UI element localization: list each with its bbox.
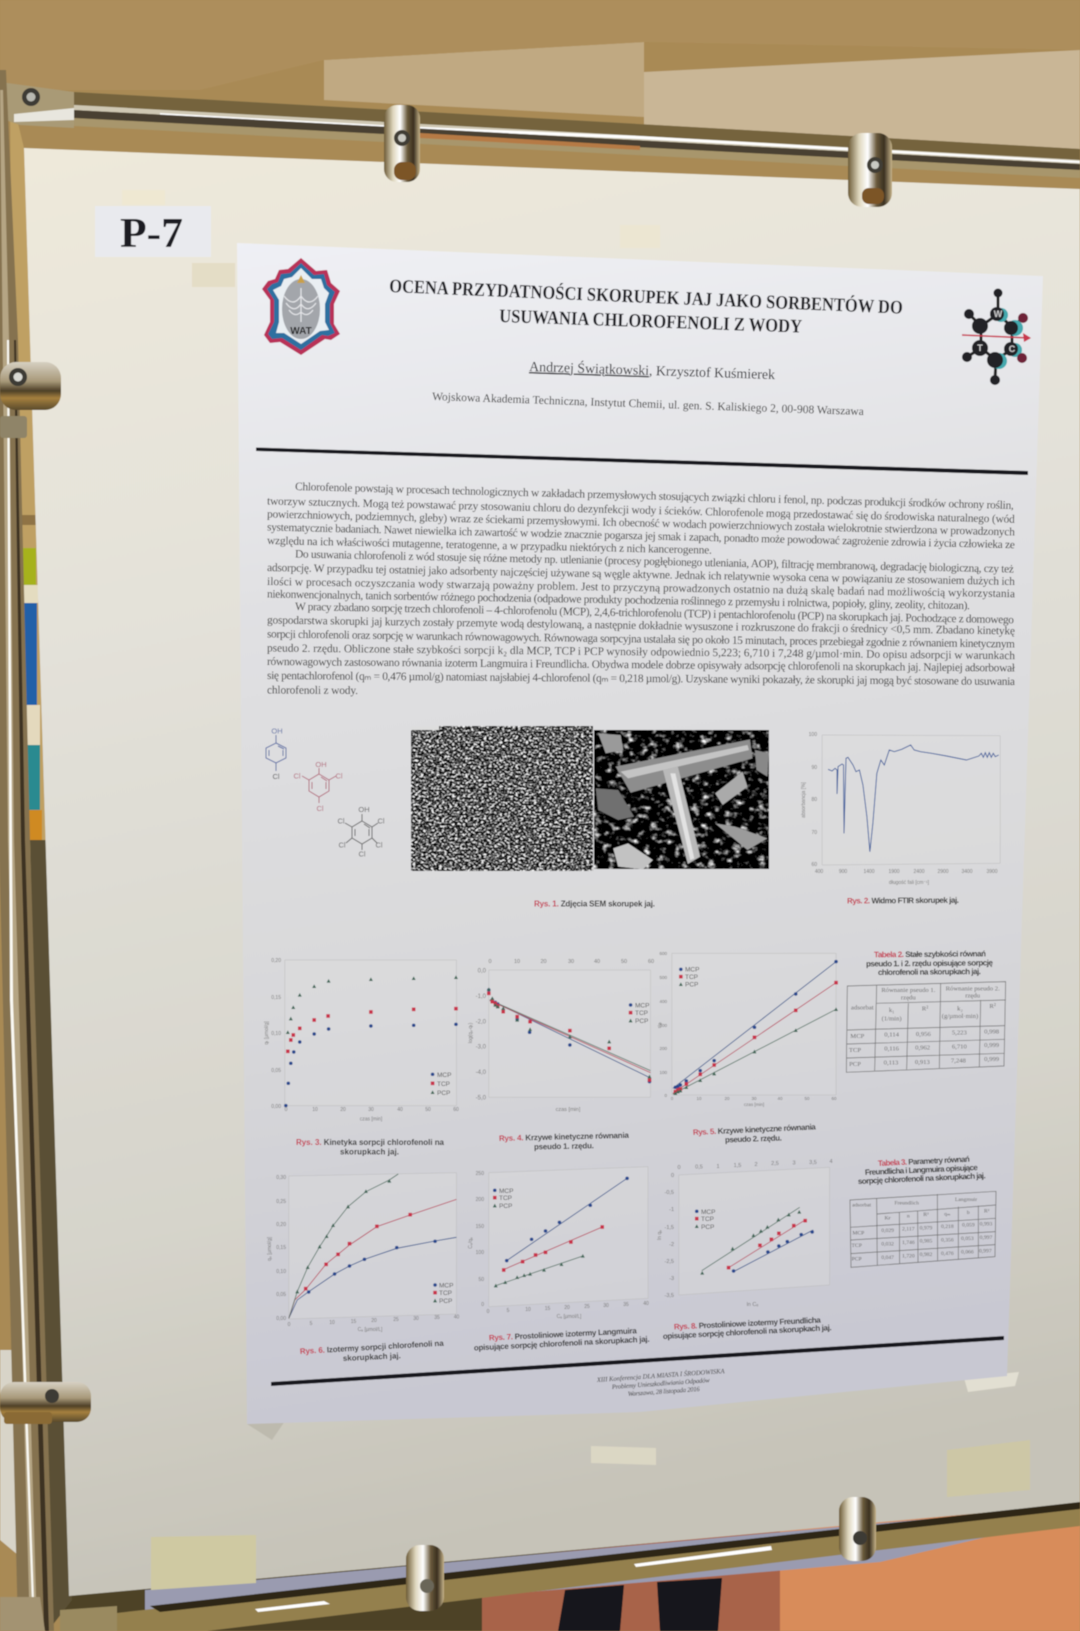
chart: Rys. 7 Langmuir: 30 bbox=[603, 1303, 609, 1309]
chart: Rys. 4 pseudo first order: 40 bbox=[594, 959, 600, 965]
chart: Rys. 6 sorption isotherms: 5 bbox=[310, 1321, 313, 1327]
table 3 grid and values: 0,985 bbox=[920, 1238, 933, 1244]
chart: Rys. 3 kinetics: MCP bbox=[437, 1072, 451, 1079]
table 2 grid and values: 0,998 bbox=[984, 1028, 1000, 1035]
table 2 grid and values: Równanie pseudo 2. bbox=[946, 985, 1000, 992]
chart: Rys. 7 Langmuir: 5 bbox=[507, 1308, 510, 1314]
table 2 grid and values: MCP bbox=[850, 1033, 865, 1040]
caption: Rys. 3 bbox=[296, 1138, 445, 1156]
table 2 grid and values: 0,956 bbox=[916, 1031, 931, 1038]
clamp: left 2 bbox=[0, 1382, 91, 1424]
chart: Rys. 6 sorption isotherms: MCP bbox=[439, 1282, 453, 1290]
chemical structures bbox=[266, 726, 385, 858]
chart: Rys. 7 Langmuir: 50 bbox=[478, 1277, 484, 1283]
chart: Rys. 6 sorption isotherms: 20 bbox=[371, 1318, 377, 1324]
chart: Rys. 4 pseudo first order: MCP bbox=[635, 1002, 649, 1010]
background: tape patches bbox=[122, 190, 1030, 1590]
structure: MCP: OH bbox=[271, 726, 283, 736]
chart: Rys. 3 kinetics: 40 bbox=[397, 1107, 403, 1113]
bottom rail bbox=[0, 1502, 1080, 1631]
chart: Rys. 8 Freundlich: 1,5 bbox=[734, 1163, 741, 1169]
chart: FTIR spectrum: 3400 bbox=[961, 869, 973, 875]
chart: Rys. 4 pseudo first order: 20 bbox=[540, 959, 547, 965]
chart: Rys. 7 Langmuir: 20 bbox=[564, 1305, 570, 1311]
table 3: Freundlich and Langmuir parameters bbox=[850, 1155, 996, 1267]
chart: Rys. 8 Freundlich: 3,5 bbox=[809, 1160, 817, 1166]
text block: introduction: chlorofenoli z wody. bbox=[267, 685, 358, 697]
table 3 grid and values: TCP bbox=[851, 1243, 862, 1249]
chart: Rys. 8 Freundlich: 0 bbox=[677, 1165, 681, 1171]
caption: Rys. 7 bbox=[474, 1326, 650, 1352]
chart: Rys. 8 Freundlich: 2,5 bbox=[771, 1161, 779, 1167]
background: colourful strip behind the board bbox=[0, 90, 72, 1631]
chart: Rys. 6 sorption isotherms: qₑ [µmol/g] bbox=[267, 1236, 273, 1261]
chart: Rys. 5 pseudo second order: 20 bbox=[724, 1096, 730, 1101]
table 2 heading: chlorofenoli na skorupkach jaj. bbox=[878, 967, 981, 977]
chart: Rys. 8 Freundlich: MCP bbox=[701, 1209, 715, 1216]
structure: PCP bbox=[337, 805, 385, 858]
structure: TCP bbox=[293, 760, 343, 813]
text block: introduction: Chlorofenole powstają w procesach technologicznych w zakładach przemysłowych stosujących związki chloru i fenol, np. podczas produkcji środków ochrony roślin, bbox=[295, 481, 1014, 512]
caption: Rys. 3: Rys. 3. Kinetyka sorpcji chlorofenoli na bbox=[296, 1138, 445, 1147]
structure: TCP: OH bbox=[315, 760, 327, 769]
table 2 grid and values: k₁ bbox=[889, 1007, 894, 1014]
caption: Rys. 3: skorupkach jaj. bbox=[340, 1148, 399, 1156]
chart: Rys. 4 pseudo first order: -5,0 bbox=[476, 1096, 487, 1102]
text block: introduction: równowagowych zastosowano równania izoterm Langmuira i Freundlicha. Obydwa modele dobrze opisywały adsorpcję chlorofenoli na skorupkach jaj. Najlepiej adsorbował bbox=[267, 656, 1016, 675]
footer: conference info: Warszawa, 28 listopada 2016 bbox=[628, 1386, 701, 1398]
chart: FTIR spectrum: 400 bbox=[815, 869, 823, 875]
chart: Rys. 6 sorption isotherms: Cₑ [µmol/L] bbox=[358, 1327, 383, 1333]
chart: Rys. 4 pseudo first order: TCP bbox=[635, 1010, 648, 1017]
text block: introduction: się pentachlorofenol (qₘ = 0,476 µmol/g) natomiast najsłabiej 4-chlorofenol (qₘ = 0,218 µmol/g). Uzyskane wyniki pokazały, że skorupki jaj mogą być stosowane do usuwania bbox=[267, 670, 1015, 688]
chart: Rys. 5 pseudo second order: 400 bbox=[659, 999, 667, 1004]
table 2 grid and values: 6,710 bbox=[952, 1044, 967, 1051]
table 2 grid and values: Równanie pseudo 1. bbox=[881, 987, 936, 994]
table 3 heading: Tabela 3. Parametry równań bbox=[878, 1155, 970, 1168]
chart: Rys. 6 sorption isotherms: 25 bbox=[393, 1317, 399, 1323]
chart: Rys. 3 kinetics: 0 bbox=[285, 1107, 288, 1113]
table 3 heading: Freundlicha i Langmuira opisujące bbox=[865, 1163, 979, 1177]
text block: introduction: powierzchniowych, podziemnych, gleby) wraz ze ściekami przemysłowymi. Ich obecność w wodach powierzchniowych została wielokrotnie stwierdzona w prowadzonych bbox=[267, 509, 1015, 539]
footer: conference info: Problemy Unieszkodliwiania Odpadów bbox=[611, 1377, 710, 1391]
chart: Rys. 5 pseudo second order: PCP bbox=[685, 982, 698, 988]
poster sheet bbox=[237, 243, 1043, 1424]
chart: Rys. 8 Freundlich: PCP bbox=[701, 1224, 714, 1231]
logo: WAT crest bbox=[262, 258, 340, 355]
caption: Rys. 4 bbox=[499, 1131, 630, 1151]
chart: Rys. 8 Freundlich: 4 bbox=[829, 1159, 833, 1165]
chart: Rys. 4 pseudo first order: czas [min] bbox=[556, 1107, 581, 1113]
table 2 heading: Tabela 2. Stałe szybkości równań bbox=[874, 949, 986, 959]
text block: introduction: ilości w procesach oczyszczania wody stwarzają poważny problem. Jest to przyczyną prowadzonych ostatnio na dużą skalę badań nad możliwością wykorzystania bbox=[267, 576, 1015, 600]
affiliation: Wojskowa Akademia Techniczna, Instytut Chemii, ul. gen. S. Kaliskiego 2, 00-908 Warszawa bbox=[432, 391, 864, 418]
table 3 grid and values: 0,053 bbox=[961, 1236, 974, 1242]
caption: Rys. 8: Rys. 8. Prostoliniowe izotermy Freundlicha bbox=[674, 1316, 821, 1331]
chart: Rys. 5 pseudo second order: 50 bbox=[804, 1096, 810, 1101]
chart: Rys. 3 kinetics: 20 bbox=[340, 1107, 346, 1113]
chart: Rys. 3 kinetics: PCP bbox=[437, 1090, 450, 1097]
chart: Rys. 7 Langmuir: TCP bbox=[499, 1195, 512, 1202]
chart: Rys. 5 pseudo second order: 60 bbox=[831, 1096, 837, 1101]
clamp: top 1 bbox=[384, 105, 420, 182]
table 3 grid and values: 1,746 bbox=[902, 1240, 915, 1246]
label: poster number P-7 bbox=[95, 206, 211, 257]
text block: introduction: gospodarstwa skorupki jaj kurzych zostały przemyte wodą destylowaną, a następnie dokładnie wysuszone i rozkruszone do frakcji o średnicy <0,5 mm. Zbadano kinetykę bbox=[267, 615, 1015, 637]
text block: introduction: sorpcji chlorofenoli oraz sorpcję w warunkach równowagowych. Równowaga sorpcyjna ustalała się po około 15 minutach, proces przebiegał zgodnie z równaniem kinetycznym bbox=[267, 629, 1015, 651]
structure: TCP: Cl bbox=[316, 804, 324, 813]
chart: Rys. 3 kinetics: 50 bbox=[425, 1107, 431, 1113]
structure: MCP: Cl bbox=[272, 772, 280, 781]
chart: Rys. 4 pseudo first order: 0 bbox=[488, 959, 492, 965]
table 2 grid and values: TCP bbox=[849, 1047, 861, 1054]
top divider rule bbox=[256, 448, 1028, 475]
icon: WTC molecule logo: C bbox=[1009, 344, 1016, 354]
chart: Rys. 8 Freundlich: -3 bbox=[669, 1276, 674, 1282]
table 2 grid and values: k₂ bbox=[957, 1005, 963, 1012]
chart: Rys. 6 sorption isotherms: 0,30 bbox=[276, 1175, 286, 1181]
chart: Rys. 4 pseudo first order: -4,0 bbox=[476, 1070, 487, 1076]
chart: Rys. 5 pseudo second order bbox=[657, 951, 837, 1107]
chart: Rys. 7 Langmuir: 40 bbox=[643, 1301, 649, 1307]
text block: introduction: Do usuwania chlorofenoli z wód stosuje się różne metody np. utlenianie (procesy pogłębionego utleniania, AOP), filtrację membranową, degradację biologiczną, czy też bbox=[295, 549, 1014, 576]
text block: introduction: względu na ich właściwości mutagenne, teratogenne, a w przypadku niektórych z nich kancerogenne. bbox=[267, 535, 712, 557]
table 2 heading: pseudo 1. i 2. rzędu opisujące sorpcję bbox=[866, 958, 994, 968]
table 2 heading bbox=[866, 949, 994, 977]
caption: Rys. 7: Rys. 7. Prostoliniowe izotermy Langmuira bbox=[489, 1326, 637, 1342]
caption: Rys. 6: skorupkach jaj. bbox=[343, 1351, 401, 1363]
chart: FTIR spectrum: 3900 bbox=[986, 869, 998, 875]
table 2 grid and values: rzędu bbox=[965, 993, 981, 1000]
logo: WAT crest: WAT bbox=[290, 326, 312, 337]
text block: introduction: adsorpcję. W przypadku tej ostatniej jako adsorbenty najczęściej używane są węgle aktywne. Jednak ich relatywnie wysoka cena w powiązaniu ze stosowaniem dużych ich bbox=[267, 562, 1015, 588]
table 2 grid and values: (1/min) bbox=[882, 1015, 902, 1022]
corner connector bbox=[0, 82, 74, 128]
chart: Rys. 3 kinetics: 0,10 bbox=[271, 1031, 281, 1037]
table 2 grid and values: 5,223 bbox=[952, 1030, 967, 1037]
caption: Rys. 8: opisujące sorpcję chlorofenoli na skorupkach jaj. bbox=[663, 1323, 832, 1341]
chart: Rys. 3 kinetics: 0,00 bbox=[271, 1104, 281, 1110]
table 2 grid and values: rzędu bbox=[901, 994, 916, 1001]
SEM image: high magnification bbox=[594, 730, 769, 869]
chart: Rys. 8 Freundlich: -2 bbox=[669, 1242, 674, 1248]
chart: Rys. 7 Langmuir bbox=[468, 1167, 649, 1320]
table 3 grid and values: 0,356 bbox=[941, 1237, 954, 1243]
table 3 grid and values: adsorbat bbox=[852, 1203, 872, 1209]
chart: Rys. 3 kinetics: 30 bbox=[368, 1107, 374, 1113]
chart: Rys. 4 pseudo first order bbox=[468, 959, 654, 1113]
table 3 heading: sorpcję chlorofenoli na skorupkach jaj. bbox=[858, 1171, 986, 1186]
caption: Rys. 2: Rys. 2. Widmo FTIR skorupek jaj. bbox=[847, 896, 959, 905]
chart: Rys. 5 pseudo second order: 0 bbox=[664, 1093, 667, 1098]
structure: PCP: Cl bbox=[377, 816, 385, 826]
chart: Rys. 4 pseudo first order: -3,0 bbox=[476, 1044, 487, 1050]
table 3 grid and values: 2,117 bbox=[902, 1226, 915, 1232]
chart: Rys. 8 Freundlich: -3,5 bbox=[665, 1293, 674, 1299]
bottom divider rule bbox=[271, 1336, 1004, 1386]
chart: Rys. 7 Langmuir: 0 bbox=[481, 1302, 484, 1308]
chart: FTIR spectrum: 2900 bbox=[937, 869, 949, 875]
table 3 grid and values: 0,993 bbox=[980, 1222, 993, 1228]
title bbox=[389, 275, 903, 338]
table 3 grid and values: 0,218 bbox=[941, 1224, 954, 1230]
chart: Rys. 3 kinetics: 60 bbox=[453, 1107, 459, 1113]
chart: FTIR spectrum: 100 bbox=[809, 732, 817, 738]
table 3 grid and values: 0,066 bbox=[961, 1250, 974, 1256]
table 3 heading bbox=[858, 1155, 986, 1186]
chart: Rys. 5 pseudo second order: 300 bbox=[659, 1023, 667, 1028]
top rail bbox=[74, 92, 1080, 178]
chart: Rys. 6 sorption isotherms: 0,10 bbox=[276, 1269, 286, 1275]
table 3 grid and values: 1,720 bbox=[902, 1254, 915, 1260]
caption: Rys. 5: pseudo 2. rzędu. bbox=[725, 1134, 782, 1144]
chart: Rys. 4 pseudo first order: 0,0 bbox=[478, 968, 487, 974]
table 3 grid and values: 0,059 bbox=[962, 1223, 975, 1229]
table 2 grid and values: 0,114 bbox=[884, 1032, 900, 1039]
chart: Rys. 4 pseudo first order: 10 bbox=[514, 959, 520, 965]
chart: Rys. 6 sorption isotherms bbox=[267, 1173, 459, 1333]
structure: TCP: Cl bbox=[293, 772, 301, 780]
table 2 grid and values: 0,962 bbox=[915, 1044, 930, 1051]
chart: Rys. 6 sorption isotherms: 10 bbox=[329, 1320, 335, 1326]
chart: FTIR spectrum: 1900 bbox=[888, 869, 900, 875]
chart: Rys. 8 Freundlich: -1,5 bbox=[665, 1225, 674, 1231]
chart: FTIR spectrum: 90 bbox=[811, 765, 817, 771]
chart: Rys. 8 Freundlich: 3 bbox=[792, 1160, 796, 1166]
text block: introduction: pseudo 2. rzędu. Obliczone stałe szybkości sorpcji k₂ dla MCP, TCP i PCP wynosiły odpowiednio 5,223; 6,710 i 7,248 g/µmol·min. Do opisu adsorpcji w warunkach bbox=[267, 643, 1015, 662]
chart: Rys. 7 Langmuir: MCP bbox=[499, 1188, 513, 1195]
chart: Rys. 6 sorption isotherms: 0,20 bbox=[276, 1222, 286, 1228]
chart: FTIR spectrum: 900 bbox=[839, 869, 847, 875]
chart: Rys. 8 Freundlich: ln qₑ bbox=[657, 1230, 663, 1240]
chart: Rys. 8 Freundlich: 2 bbox=[754, 1162, 758, 1168]
chart: Rys. 4 pseudo first order: 50 bbox=[621, 959, 627, 965]
chart: Rys. 3 kinetics: TCP bbox=[437, 1081, 450, 1088]
caption: Rys. 4: pseudo 1. rzędu. bbox=[534, 1141, 594, 1151]
table 2 grid and values: 0,999 bbox=[984, 1042, 1000, 1049]
table 2 grid and values: (g/µmol·min) bbox=[942, 1013, 978, 1020]
chart: Rys. 3 kinetics: czas [min] bbox=[360, 1116, 383, 1122]
icon: WTC molecule logo: T bbox=[977, 343, 983, 353]
table 2 grid and values: 0,113 bbox=[884, 1060, 899, 1067]
table 2 grid and values: 7,248 bbox=[951, 1058, 966, 1065]
table 2: rate constants bbox=[846, 949, 1006, 1072]
structure: TCP: Cl bbox=[335, 772, 343, 780]
chart: Rys. 8 Freundlich: -2,5 bbox=[665, 1259, 674, 1265]
chart: FTIR spectrum bbox=[801, 732, 1000, 886]
label: poster number P-7: P-7 bbox=[120, 211, 183, 257]
icon: WTC molecule logo: W bbox=[994, 309, 1003, 319]
table 3 grid and values: Freundlich bbox=[894, 1200, 919, 1206]
left vertical pipe bbox=[0, 70, 54, 1631]
chart: FTIR spectrum: długość fali [cm⁻¹] bbox=[889, 880, 930, 886]
chart: Rys. 8 Freundlich: -1 bbox=[669, 1207, 674, 1213]
chart: Rys. 6 sorption isotherms: 35 bbox=[434, 1315, 440, 1321]
chart: Rys. 5 pseudo second order: 100 bbox=[659, 1070, 667, 1075]
blue lower board edge bbox=[145, 1505, 1080, 1625]
clamp: bottom 2 bbox=[839, 1497, 876, 1561]
caption: Rys. 7: opisujące sorpcję chlorofenoli na skorupkach jaj. bbox=[474, 1335, 650, 1352]
table 3 grid and values: 0,997 bbox=[980, 1235, 993, 1241]
chart: Rys. 8 Freundlich bbox=[657, 1159, 833, 1308]
chart: Rys. 8 Freundlich: -0,5 bbox=[665, 1190, 674, 1196]
chart: Rys. 6 sorption isotherms: 0,00 bbox=[276, 1316, 286, 1322]
table 3 grid and values: b bbox=[967, 1210, 970, 1216]
table 3 grid and values: R² bbox=[923, 1212, 929, 1218]
chart: Rys. 6 sorption isotherms: 15 bbox=[351, 1319, 356, 1325]
table 2 grid and values: 0,913 bbox=[915, 1059, 930, 1066]
chart: Rys. 4 pseudo first order: log(qₑ-qₜ) bbox=[468, 1022, 474, 1043]
clamp: top 2 bbox=[848, 133, 892, 207]
structure: PCP: Cl bbox=[358, 850, 366, 858]
chart: Rys. 5 pseudo second order: 200 bbox=[659, 1046, 667, 1051]
icon: WTC molecule logo bbox=[962, 288, 1031, 385]
chart: Rys. 7 Langmuir: 250 bbox=[476, 1171, 484, 1177]
table 2 grid and values: adsorbat bbox=[851, 1005, 874, 1012]
chart: Rys. 5 pseudo second order: t/qₜ bbox=[657, 1021, 662, 1028]
table 2 grid and values: PCP bbox=[849, 1061, 861, 1068]
footer: conference info: XIII Konferencja DLA MIASTA I ŚRODOWISKA bbox=[596, 1367, 726, 1384]
chart: Rys. 5 pseudo second order: 600 bbox=[659, 951, 667, 956]
chart: Rys. 7 Langmuir: 0 bbox=[487, 1309, 490, 1315]
table 3 grid and values: 0,047 bbox=[881, 1255, 894, 1261]
chart: Rys. 5 pseudo second order: 500 bbox=[659, 975, 667, 980]
chart: Rys. 7 Langmuir: 150 bbox=[476, 1224, 484, 1230]
footer: conference info bbox=[596, 1367, 726, 1398]
structure: PCP: Cl bbox=[375, 840, 383, 850]
authors: Andrzej Świątkowski, Krzysztof Kuśmierek bbox=[529, 358, 775, 383]
table 3 grid and values: Langmuir bbox=[955, 1197, 977, 1203]
text block: introduction: niekonwencjonalnych, tanich sorbentów różnego pochodzenia (odpadowe produkty pochodzenia roślinnego z przemysłu i rolnictwa, popioły, gliny, zeolity, chitozan). bbox=[267, 589, 970, 612]
chart: Rys. 5 pseudo second order: 30 bbox=[751, 1096, 757, 1101]
chart: Rys. 3 kinetics: 0,15 bbox=[271, 995, 281, 1001]
table 3 grid and values: qₘ bbox=[944, 1211, 951, 1217]
chart: Rys. 8 Freundlich: 0,5 bbox=[695, 1164, 703, 1170]
clamp: left 1 bbox=[0, 362, 61, 438]
table 3 grid and values: MCP bbox=[852, 1231, 864, 1237]
chart: Rys. 4 pseudo first order: 60 bbox=[648, 959, 654, 965]
table 3 grid and values bbox=[850, 1191, 996, 1267]
table 3 grid and values: R² bbox=[984, 1209, 990, 1215]
chart: Rys. 5 pseudo second order: TCP bbox=[685, 974, 698, 981]
chart: Rys. 5 pseudo second order: MCP bbox=[685, 966, 699, 974]
table 3 grid and values: Kғ bbox=[884, 1216, 892, 1222]
text block: introduction: systematycznie badaniach. Nawet niewielka ich zawartość w wodzie znacznie pogarsza jej smak i zapach, ponadto może powodować zagrożenie zdrowia i życia człowieka ze bbox=[267, 522, 1015, 551]
chart: Rys. 6 sorption isotherms: TCP bbox=[439, 1290, 452, 1297]
chart: Rys. 6 sorption isotherms: PCP bbox=[439, 1298, 452, 1305]
chart: Rys. 8 Freundlich: TCP bbox=[701, 1216, 714, 1223]
chart: Rys. 6 sorption isotherms: 0,05 bbox=[276, 1292, 286, 1298]
chart: Rys. 5 pseudo second order: 0 bbox=[671, 1096, 674, 1101]
chart: FTIR spectrum: 70 bbox=[811, 830, 817, 836]
chart: Rys. 5 pseudo second order: 10 bbox=[696, 1096, 702, 1101]
chart: Rys. 7 Langmuir: 15 bbox=[545, 1306, 550, 1312]
table 3 grid and values: 0,982 bbox=[920, 1252, 933, 1258]
table 3 grid and values: 0,476 bbox=[941, 1251, 954, 1257]
title: OCENA PRZYDATNOŚCI SKORUPEK JAJ JAKO SORBENTÓW DO bbox=[389, 275, 903, 319]
table 3 grid and values: 0,979 bbox=[920, 1225, 933, 1231]
chart: Rys. 5 pseudo second order: 40 bbox=[777, 1096, 783, 1101]
chart: Rys. 8 Freundlich: ln Cₑ bbox=[747, 1302, 758, 1308]
table 3 grid and values: 0,029 bbox=[881, 1228, 894, 1234]
table 2 grid and values: R² bbox=[922, 1005, 928, 1012]
chart: FTIR spectrum: 2400 bbox=[913, 869, 925, 875]
title: USUWANIA CHLOROFENOLI Z WODY bbox=[499, 306, 803, 338]
chart: Rys. 4 pseudo first order: PCP bbox=[635, 1018, 648, 1025]
table 2 grid and values: R² bbox=[989, 1003, 996, 1010]
chart: Rys. 7 Langmuir: PCP bbox=[499, 1203, 512, 1210]
chart: Rys. 8 Freundlich: 1 bbox=[716, 1164, 720, 1170]
structure: PCP: Cl bbox=[337, 816, 345, 826]
chart: Rys. 3 kinetics: qₜ [µmol/g] bbox=[264, 1021, 270, 1045]
chart: Rys. 6 sorption isotherms: 0,15 bbox=[276, 1245, 286, 1251]
table 3 grid and values: 0,032 bbox=[881, 1241, 894, 1247]
text block: introduction: W pracy zbadano sorpcję trzech chlorofenoli – 4-chlorofenolu (MCP), 2,4,6-trichlorofenolu (TCP) i pentachlorofenolu (PCP) na skorupkach jaj. Pochodzące z domowego bbox=[295, 601, 1014, 626]
clamp: bottom 1 bbox=[406, 1545, 444, 1611]
chart: Rys. 7 Langmuir: 35 bbox=[623, 1302, 629, 1308]
chart: Rys. 7 Langmuir: 100 bbox=[476, 1250, 484, 1256]
chart: Rys. 4 pseudo first order: -1,0 bbox=[476, 994, 487, 1000]
chart: Rys. 3 kinetics: 0,05 bbox=[271, 1068, 281, 1074]
text block: introduction bbox=[267, 481, 1016, 697]
chart: Rys. 7 Langmuir: 25 bbox=[584, 1304, 590, 1310]
chart: Rys. 7 Langmuir: 10 bbox=[525, 1307, 531, 1313]
chart: FTIR spectrum: 80 bbox=[811, 797, 817, 803]
caption: Rys. 5 bbox=[693, 1122, 817, 1144]
chart: Rys. 8 Freundlich: 0 bbox=[671, 1173, 674, 1179]
table 2 grid and values bbox=[846, 982, 1006, 1072]
chart: FTIR spectrum: 1400 bbox=[863, 869, 875, 875]
chart: Rys. 3 kinetics bbox=[264, 958, 459, 1122]
table 3 grid and values: 0,997 bbox=[979, 1248, 992, 1254]
chart: Rys. 3 kinetics: 0,20 bbox=[271, 958, 281, 964]
text block: introduction: tworzyw sztucznych. Mogą też powstawać przy stosowaniu chloru do dezynfekcji wody i ścieków. Chlorofenole mogą przedostawać się do środowiska naturalnego (wód bbox=[267, 496, 1015, 526]
structure: PCP: OH bbox=[358, 805, 370, 814]
chart: Rys. 7 Langmuir: 200 bbox=[476, 1197, 484, 1203]
caption: Rys. 6: Rys. 6. Izotermy sorpcji chlorofenoli na bbox=[300, 1339, 444, 1356]
chart: Rys. 7 Langmuir: Cₑ/qₑ bbox=[468, 1237, 474, 1249]
table 2 grid and values: 0,999 bbox=[984, 1056, 1000, 1063]
chart: FTIR spectrum: absorbancja [%] bbox=[801, 781, 807, 818]
chart: FTIR spectrum: 60 bbox=[811, 862, 817, 868]
chart: Rys. 7 Langmuir: Cₑ [µmol/L] bbox=[557, 1314, 582, 1320]
caption: Rys. 5: Rys. 5. Krzywe kinetyczne równania bbox=[693, 1122, 817, 1137]
chart: Rys. 6 sorption isotherms: 30 bbox=[413, 1316, 419, 1322]
chart: Rys. 5 pseudo second order: czas [min] bbox=[744, 1102, 764, 1107]
chart: Rys. 6 sorption isotherms: 0,25 bbox=[276, 1199, 286, 1205]
table 3 grid and values: PCP bbox=[852, 1256, 862, 1262]
chart: Rys. 3 kinetics: 10 bbox=[312, 1107, 318, 1113]
chart: Rys. 4 pseudo first order: -2,0 bbox=[476, 1020, 487, 1026]
table 2 grid and values: 0,116 bbox=[884, 1045, 900, 1052]
caption: Rys. 4: Rys. 4. Krzywe kinetyczne równania bbox=[499, 1131, 630, 1143]
chart: Rys. 4 pseudo first order: 30 bbox=[568, 959, 574, 965]
SEM image: low magnification bbox=[411, 726, 593, 871]
table 3 grid and values: n bbox=[907, 1214, 910, 1220]
background: floor and legs bbox=[60, 1505, 1080, 1631]
structure: MCP bbox=[266, 726, 286, 781]
chart: Rys. 6 sorption isotherms: 40 bbox=[454, 1314, 459, 1320]
chart: Rys. 6 sorption isotherms: 0 bbox=[288, 1322, 291, 1328]
structure: PCP: Cl bbox=[338, 840, 346, 850]
caption: Rys. 1: Rys. 1. Zdjęcia SEM skorupek jaj. bbox=[534, 900, 655, 908]
